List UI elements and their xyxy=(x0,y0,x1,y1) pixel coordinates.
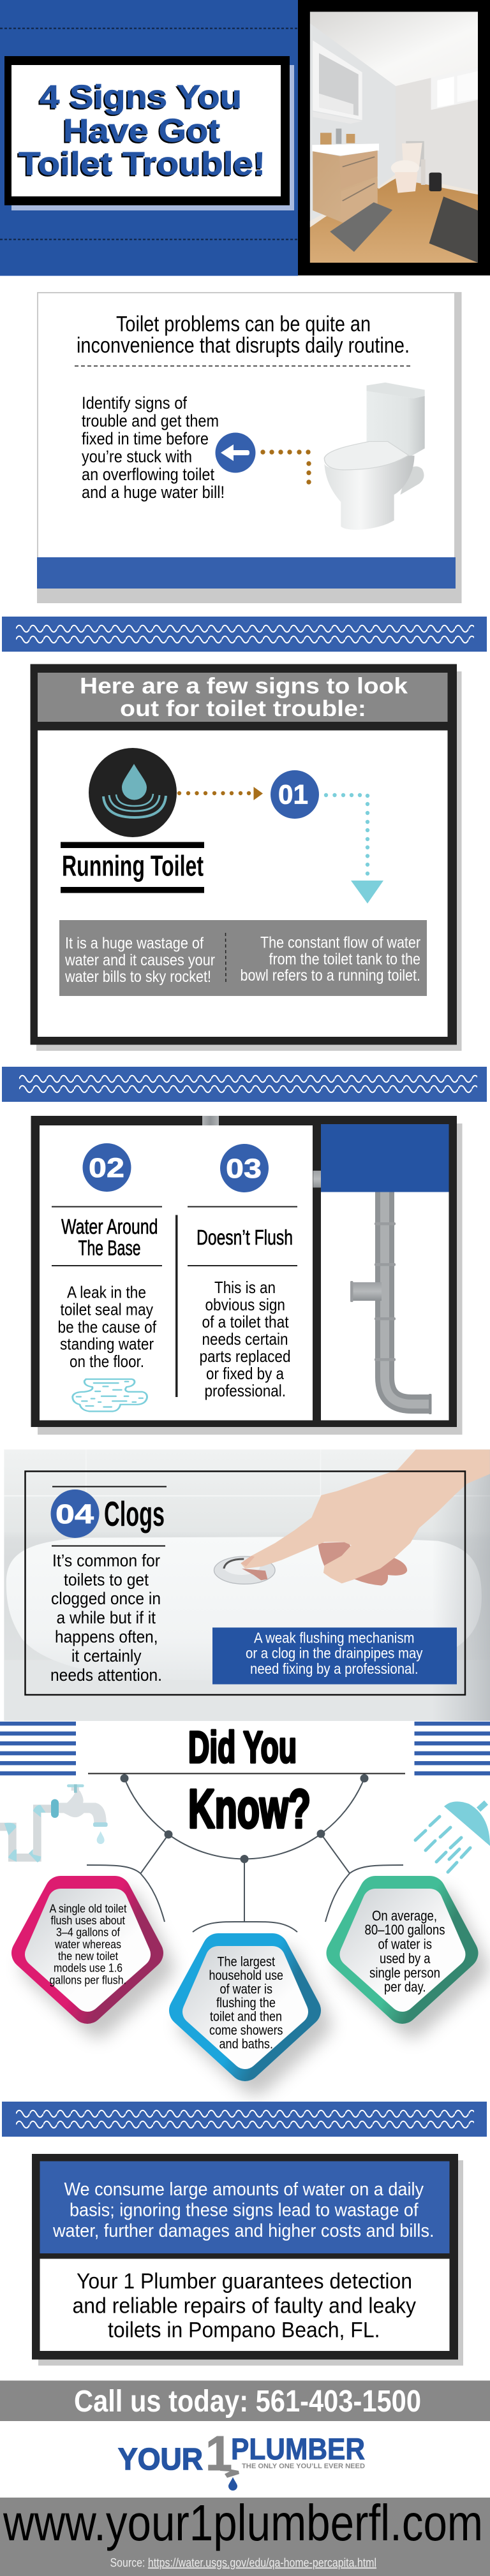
sign 02: water around the base: 02 xyxy=(89,1153,124,1183)
intro heading: Toilet problems can be quite an xyxy=(116,312,371,337)
fact card: blue: toilet and then xyxy=(210,2009,282,2024)
sign 03: doesn't flush: parts replaced xyxy=(199,1347,291,1366)
conclusion: white text block: toilets in Pompano Beach, FL. xyxy=(108,2318,380,2343)
callout: need fixing by a professional. xyxy=(250,1660,419,1677)
wave divider 2 xyxy=(2,1067,487,1102)
fact card: green: single person xyxy=(369,1965,440,1980)
number badge 04: 04 xyxy=(56,1499,94,1530)
clogs paragraph: it certainly xyxy=(71,1646,142,1665)
fact card: green xyxy=(342,1892,462,2008)
clogs paragraph: happens often, xyxy=(55,1627,158,1646)
sign 03: doesn't flush: 03 xyxy=(226,1153,262,1184)
clogs paragraph: toilets to get xyxy=(64,1570,149,1589)
number badge 01 xyxy=(271,770,319,819)
conclusion: blue text block: We consume large amounts of water on a daily xyxy=(64,2179,424,2200)
dotted connector xyxy=(260,450,311,485)
heading: clogs: Clogs xyxy=(104,1494,165,1533)
clogs paragraph xyxy=(50,1551,162,1685)
heading: running toilet xyxy=(61,842,204,893)
fact card: pink: 3–4 gallons of xyxy=(56,1926,121,1938)
fact card: pink: A single old toilet xyxy=(50,1901,126,1915)
sign 02: water around the base: Water Around xyxy=(61,1215,158,1238)
fact card: pink xyxy=(27,1892,147,2008)
conclusion: white text block: and reliable repairs of faulty and leaky xyxy=(73,2294,416,2318)
call to action band: Call us today: 561-403-1500 xyxy=(74,2385,421,2419)
sign 03: doesn't flush: obvious sign xyxy=(205,1295,285,1314)
sign 03: doesn't flush: professional. xyxy=(204,1381,286,1400)
fact card: pink: flush uses about xyxy=(51,1914,125,1927)
panel: clogs xyxy=(26,1472,465,1695)
icon: shower xyxy=(415,1801,490,1872)
logo: THE ONLY ONE YOU’LL EVER NEED xyxy=(242,2463,365,2470)
fact card: green: 80–100 gallons xyxy=(365,1922,445,1938)
sign 02: water around the base: toilet seal may xyxy=(60,1299,153,1319)
did you know section backing xyxy=(0,1721,490,2102)
number badge 04 xyxy=(51,1489,100,1538)
panel heading: out for toilet trouble: xyxy=(120,696,366,721)
description box: water and it causes your xyxy=(64,951,215,969)
conclusion: blue text block: basis; ignoring these signs lead to wastage of xyxy=(70,2200,419,2220)
fact card: green: of water is xyxy=(378,1936,432,1952)
sign 03: doesn't flush xyxy=(188,1144,297,1400)
fact card: blue: come showers xyxy=(209,2023,283,2038)
conclusion: white text block xyxy=(40,2258,449,2351)
icon: arrow left xyxy=(216,432,255,473)
intro paragraph: an overflowing toilet xyxy=(82,465,214,484)
panel heading xyxy=(80,673,408,721)
sign 03: doesn't flush: Doesn’t Flush xyxy=(197,1226,293,1249)
fact card: pink: gallons per flush. xyxy=(50,1973,126,1987)
sign 02: water around the base: The Base xyxy=(78,1236,140,1260)
panel: clogs photo background xyxy=(4,1449,490,1721)
title: 4 Signs You xyxy=(40,78,242,115)
dotted arrow down xyxy=(324,793,383,904)
description box: bowl refers to a running toilet. xyxy=(240,967,420,984)
wave divider 3 xyxy=(2,2102,487,2137)
description box: from the toilet tank to the xyxy=(269,950,420,968)
icon: toilet xyxy=(324,383,425,530)
clogs paragraph: needs attention. xyxy=(50,1665,162,1685)
conclusion: white text block: Your 1 Plumber guarantees detection xyxy=(77,2269,412,2294)
photo: bathroom xyxy=(310,11,478,263)
source line: Source: https://water.usgs.gov/edu/qa-home-percapita.html xyxy=(110,2557,376,2570)
intro paragraph: you’re stuck with xyxy=(82,447,192,466)
panel: intro xyxy=(37,292,462,603)
heading: did you know: Know? xyxy=(188,1779,311,1840)
panel: running toilet xyxy=(31,664,462,1051)
sign 02: water around the base xyxy=(52,1143,162,1411)
sign 03: doesn't flush: or fixed by a xyxy=(206,1364,284,1383)
intro paragraph: Identify signs of xyxy=(82,393,187,413)
intro paragraph xyxy=(82,393,225,502)
sign 02: water around the base: A leak in the xyxy=(67,1283,146,1302)
connector diagram xyxy=(87,1774,405,1932)
fact card: blue: of water is xyxy=(219,1982,272,1997)
number badge 01: 01 xyxy=(278,779,308,810)
fact card: pink: the new toilet xyxy=(58,1949,118,1963)
footer band xyxy=(0,2494,490,2576)
fact card: green: On average, xyxy=(372,1908,437,1924)
fact card: pink: models use 1.6 xyxy=(54,1961,122,1974)
sign 03: doesn't flush: This is an xyxy=(214,1278,276,1297)
fact card: blue: flushing the xyxy=(216,1995,276,2010)
stripes left and right xyxy=(0,1722,490,1775)
intro heading xyxy=(77,312,410,358)
fact card: green: used by a xyxy=(380,1950,431,1966)
logo xyxy=(118,2426,365,2491)
fact card: blue: household use xyxy=(209,1968,283,1983)
title xyxy=(19,78,265,182)
panel: conclusion xyxy=(32,2154,463,2366)
sign 03: doesn't flush: of a toilet that xyxy=(202,1312,289,1331)
logo: 1 xyxy=(205,2426,232,2481)
icon: puddle xyxy=(73,1379,147,1411)
heading: did you know xyxy=(188,1722,311,1840)
heading: did you know: Did You xyxy=(188,1722,297,1772)
description box xyxy=(59,920,427,996)
conclusion: blue text block: water, further damages and higher costs and bills. xyxy=(52,2221,434,2241)
conclusion: blue text block xyxy=(40,2162,449,2253)
hero banner xyxy=(0,0,490,276)
fact card: green: per day. xyxy=(384,1979,426,1994)
description box: water bills to sky rocket! xyxy=(64,968,211,986)
title box xyxy=(4,56,294,210)
fact card: pink: water whereas xyxy=(54,1937,121,1951)
intro paragraph: trouble and get them xyxy=(82,411,219,430)
logo: YOUR xyxy=(118,2443,203,2477)
fact card: blue: The largest xyxy=(217,1954,275,1969)
description box: It is a huge wastage of xyxy=(65,935,204,953)
icon: faucet xyxy=(0,1784,108,1862)
clogs paragraph: It’s common for xyxy=(52,1551,160,1570)
call to action band xyxy=(0,2381,490,2421)
column divider xyxy=(175,1215,177,1397)
photo: finger on flush button xyxy=(214,1449,490,1586)
callout: or a clog in the drainpipes may xyxy=(246,1645,423,1662)
sign 02: water around the base: be the cause of xyxy=(57,1317,157,1336)
panel heading: Here are a few signs to look xyxy=(80,673,408,699)
callout: A weak flushing mechanism xyxy=(254,1630,415,1646)
sign 02: water around the base: standing water xyxy=(60,1334,154,1353)
intro heading: inconvenience that disrupts daily routine. xyxy=(77,333,410,358)
callout xyxy=(212,1627,457,1685)
title: Toilet Trouble! xyxy=(19,145,265,182)
logo: PLUMBER xyxy=(231,2432,365,2466)
sign 02: water around the base: on the floor. xyxy=(70,1352,144,1371)
intro paragraph: fixed in time before xyxy=(82,429,209,448)
icon: pipe xyxy=(350,1192,431,1414)
description box: The constant flow of water xyxy=(260,933,420,951)
fact card: blue xyxy=(185,1949,305,2065)
heading: running toilet: Running Toilet xyxy=(62,849,204,882)
sign 03: doesn't flush: needs certain xyxy=(202,1329,288,1349)
wave divider 1 xyxy=(2,617,487,652)
panel: signs 02 and 03 xyxy=(31,1116,462,1435)
clogs paragraph: clogged once in xyxy=(51,1589,161,1608)
icon: water drop xyxy=(89,748,177,837)
dotted arrow to 01 xyxy=(177,787,263,800)
intro paragraph: and a huge water bill! xyxy=(82,483,225,502)
clogs paragraph: a while but if it xyxy=(56,1608,156,1627)
fact card: blue: and baths. xyxy=(219,2037,273,2052)
title: Have Got xyxy=(63,112,220,149)
